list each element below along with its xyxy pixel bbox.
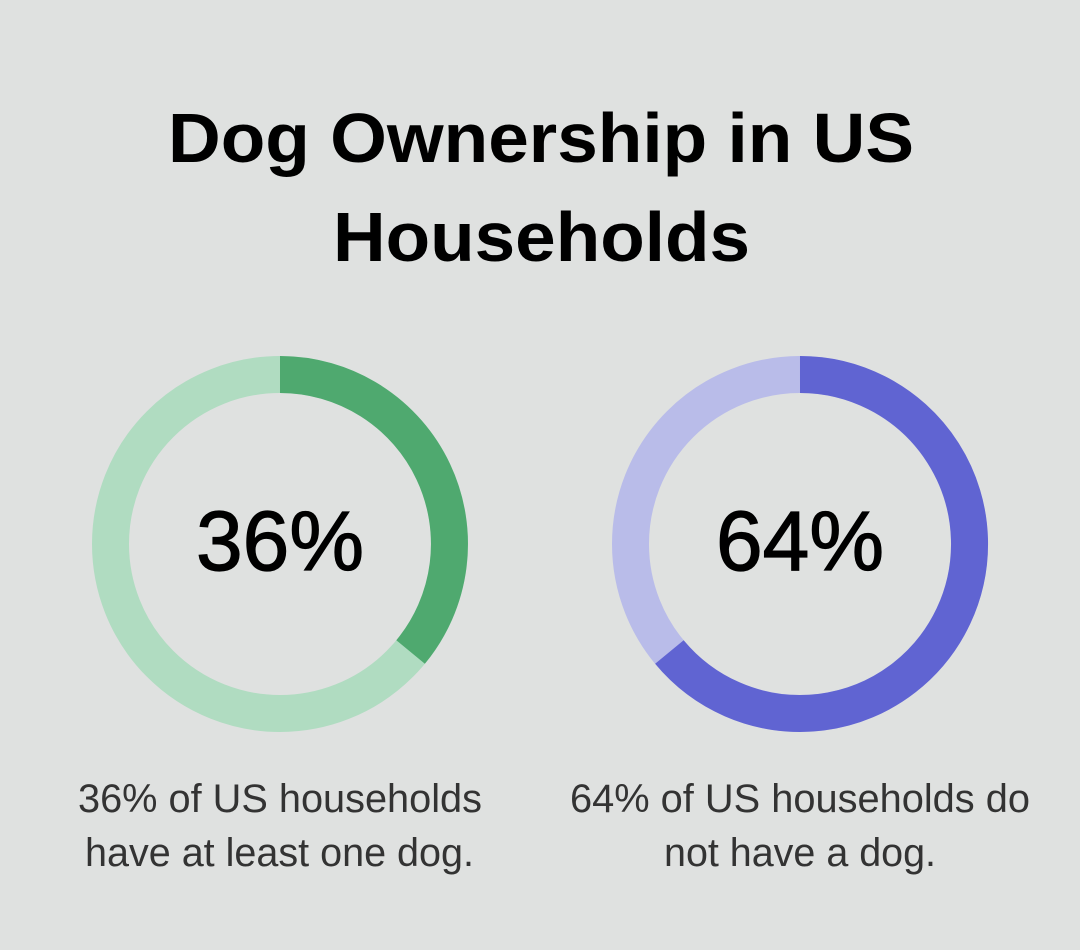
caption: 64% bbox=[570, 777, 1030, 875]
caption: 36%: 36% of US households bbox=[78, 777, 482, 821]
panel: 64% have no dog bbox=[570, 374, 1030, 875]
caption: 64%: not have a dog. bbox=[664, 831, 936, 875]
caption: 36%: have at least one dog. bbox=[85, 831, 474, 875]
value: 36%: 36% bbox=[196, 494, 364, 588]
donut chart: 36% bbox=[110, 374, 450, 714]
caption: 36% bbox=[78, 777, 482, 875]
title: Dog Ownership in US bbox=[168, 99, 914, 177]
donut chart: 64% bbox=[630, 374, 970, 714]
caption: 64%: 64% of US households do bbox=[570, 777, 1030, 821]
panel: 36% have a dog bbox=[78, 374, 482, 875]
title: Households bbox=[333, 198, 750, 276]
value: 64%: 64% bbox=[716, 494, 884, 588]
title bbox=[168, 99, 914, 276]
